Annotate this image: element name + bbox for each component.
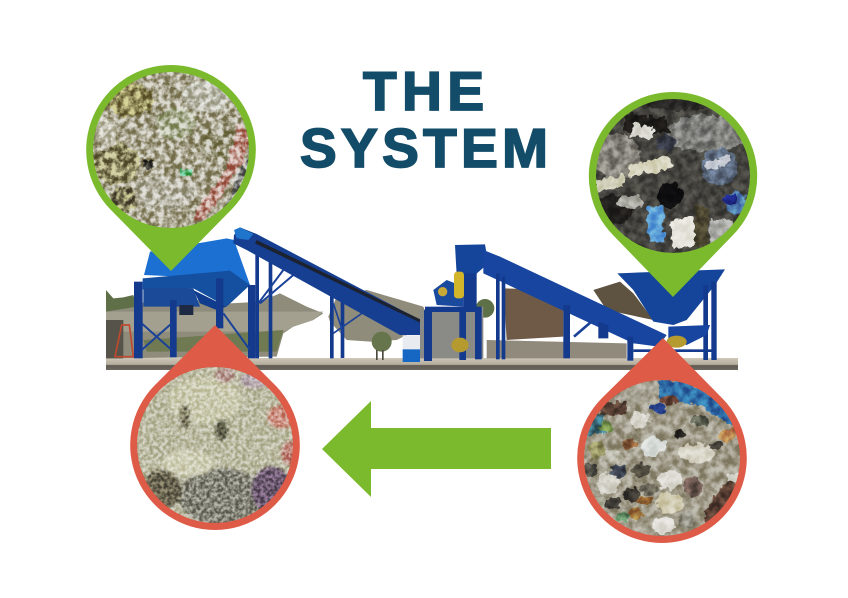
ground strip [106, 358, 738, 370]
recycling plant machinery photo [106, 227, 738, 370]
left section of plant with hopper and conveyor [106, 227, 432, 362]
right section of plant with shredder and feed hopper [420, 244, 725, 361]
pin: crushed mixed recyclables (bottom right) [577, 338, 747, 543]
pin: crushed glass cullet (top left) [86, 65, 257, 271]
pin: fine sand output (bottom left) [130, 325, 300, 530]
title: THE [363, 60, 484, 122]
title [300, 60, 548, 179]
title: SYSTEM [300, 117, 548, 179]
arrow: right to left flow [322, 401, 551, 497]
pin: whole glass bottles (top right) [589, 92, 757, 297]
